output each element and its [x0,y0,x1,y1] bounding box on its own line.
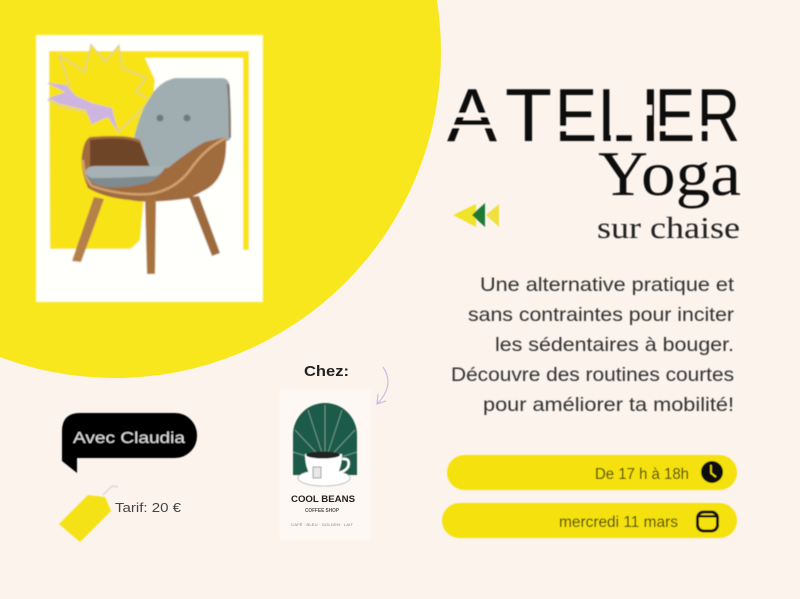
yellow backdrop [49,51,249,250]
pill: date [442,503,737,538]
title: ATELIER: E [655,73,695,157]
speech bubble [62,413,197,473]
text block: description: Une alternative pratique et [480,274,735,296]
text block: description: Découvre des routines courtes [451,364,734,386]
title: ATELIER: R [697,73,740,157]
pill: time: De 17 h à 18h [595,466,689,483]
title: ATELIER: I [640,73,661,157]
chair [72,78,230,274]
icon: burst [48,44,150,132]
chair shell [82,136,226,202]
panel: cool beans logo: COFFEE SHOP [305,508,340,514]
chair legs [72,197,104,262]
icon: clock [701,461,723,483]
title: sur chaise: sur chaise [597,210,740,245]
pill: time [447,455,737,490]
logo arch [293,403,357,486]
stencil cuts [445,105,709,141]
title [445,73,741,245]
panel: cool beans logo: CAFÉ · BLEU · GOLDEN · LAIT [291,522,354,527]
icon: price tag [59,486,118,542]
seat cushion [86,166,166,187]
heading: Chez: Chez: [304,363,349,380]
title: ATELIER: E [555,73,597,157]
chair back [134,78,230,170]
speech bubble: Avec Claudia [73,430,185,447]
title: ATELIER: T [505,73,552,157]
text block: description: sans contraintes pour inciter [468,304,735,326]
panel: cool beans logo [279,390,371,540]
title: ATELIER: L [598,73,634,157]
icon: calendar [698,512,718,531]
icon: triple arrows [453,203,499,227]
pill: date: mercredi 11 mars [559,514,678,531]
text block: description [451,274,735,416]
text block: description: pour améliorer ta mobilité! [483,394,734,416]
text block: description: les sédentaires à bouger. [495,334,734,356]
icon: curved arrow [377,367,388,404]
title: ATELIER [447,73,740,157]
price: Tarif: 20 € [115,500,182,515]
yellow circle [0,0,441,378]
title: ATELIER: A [447,73,497,157]
panel: chair photo [36,35,263,302]
title: Yoga: Yoga [598,138,741,209]
logo text: COOL BEANS [291,494,355,505]
